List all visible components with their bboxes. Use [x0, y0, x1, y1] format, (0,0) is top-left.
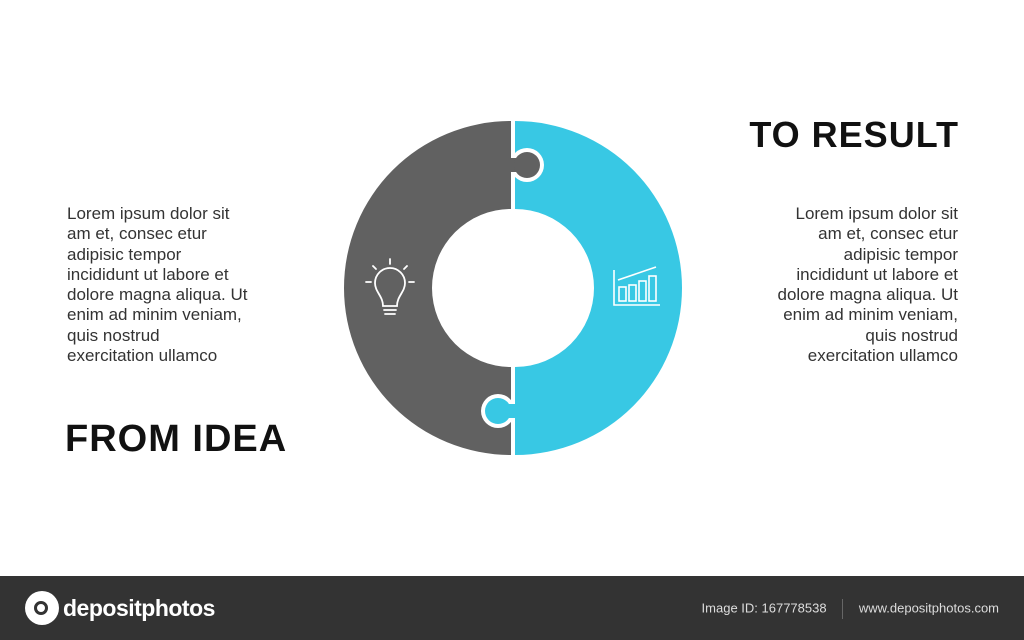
text block: left: quis nostrud: [67, 326, 160, 345]
text block: right: enim ad minim veniam,: [783, 305, 958, 324]
icon: light bulb: [366, 259, 414, 314]
heading: to result: TO RESULT: [749, 114, 959, 155]
footer text: Image ID: 167778538 www.depositphotos.com: [702, 600, 999, 615]
text block: left: incididunt ut labore et: [67, 265, 229, 284]
text block: left: enim ad minim veniam,: [67, 305, 242, 324]
text block: right: Lorem ipsum dolor sit: [795, 204, 958, 223]
text block: left: exercitation ullamco: [67, 346, 217, 365]
text block: right: [777, 204, 958, 365]
text block: right: dolore magna aliqua. Ut: [777, 285, 958, 304]
heading: from idea: FROM IDEA: [65, 418, 287, 460]
text block: left: Lorem ipsum dolor sit: [67, 204, 230, 223]
panel: blue half: [515, 121, 682, 455]
panel: gray half: [344, 121, 511, 455]
text block: left: [67, 204, 248, 365]
puzzle knob: top gray: [505, 148, 544, 182]
text block: left: adipisic tempor: [67, 245, 181, 264]
text block: right: adipisic tempor: [844, 245, 958, 264]
logo: [25, 591, 215, 625]
text block: right: am et, consec etur: [818, 224, 958, 243]
icon: bar chart: [614, 267, 660, 305]
text block: right: incididunt ut labore et: [796, 265, 958, 284]
text block: right: exercitation ullamco: [808, 346, 958, 365]
text block: left: am et, consec etur: [67, 224, 207, 243]
puzzle knob: bottom blue: [481, 394, 517, 428]
text block: right: quis nostrud: [865, 326, 958, 345]
logo: depositphotos: [63, 594, 215, 620]
footer bar: [0, 576, 1024, 640]
text block: left: dolore magna aliqua. Ut: [67, 285, 248, 304]
